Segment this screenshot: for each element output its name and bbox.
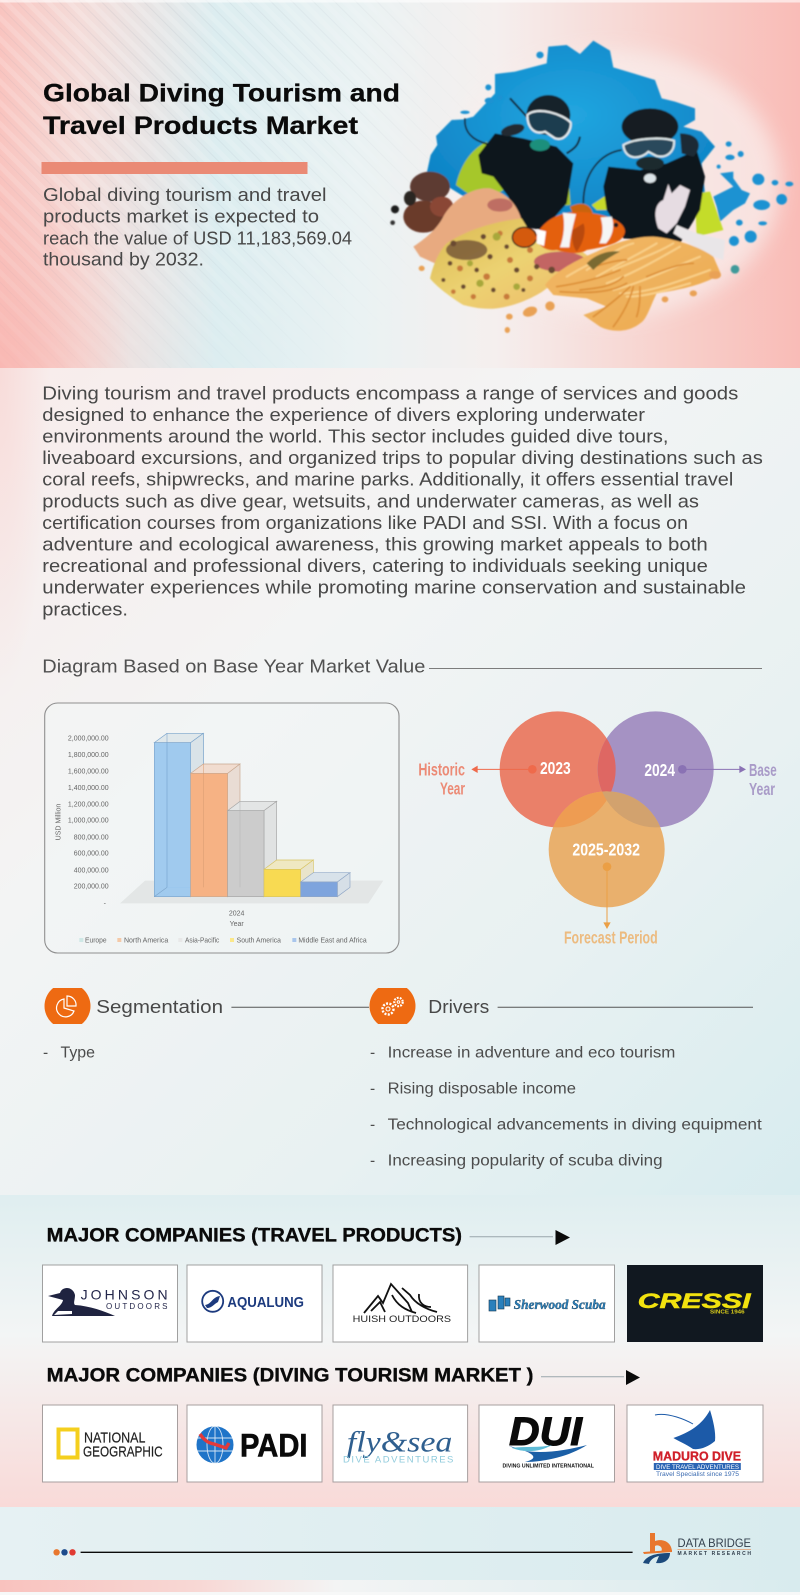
bar: South America (264, 860, 313, 897)
intro text: reach the value of USD 11,183,569.04 (43, 228, 352, 248)
label: 2023: 2023 (540, 758, 571, 778)
chart floor (120, 881, 383, 903)
intro text (43, 185, 352, 270)
heading: travel products companies: MAJOR COMPANIES (TRAVEL PRODUCTS) (47, 1226, 462, 1246)
description paragraph: environments around the world. This sector includes guided dive tours, (42, 426, 669, 446)
drivers heading: Drivers (428, 996, 489, 1017)
intro text: Global diving tourism and travel (43, 185, 326, 205)
description paragraph: practices. (42, 599, 128, 619)
icon: pie chart (44, 988, 90, 1024)
y axis labels: 200,000.00 (74, 884, 109, 891)
drivers list: Technological advancements in diving equipment (388, 1116, 763, 1134)
bar chart (55, 733, 383, 944)
blue water splash (427, 41, 715, 227)
logo: Sherwood Scuba (479, 1265, 614, 1342)
description paragraph: certification courses from organizations like PADI and SSI. With a focus on (42, 513, 688, 533)
title accent bar (42, 162, 308, 174)
peach coral (413, 188, 522, 263)
circle: forecast (549, 791, 665, 907)
venn diagram: historic, base and forecast years (418, 711, 777, 947)
y axis labels: 400,000.00 (74, 867, 109, 874)
logo: Johnson Outdoors (42, 1265, 178, 1342)
hero illustration: divers, coral and clownfish (390, 41, 793, 333)
y axis labels: 600,000.00 (74, 851, 109, 858)
description paragraph: designed to enhance the experience of divers exploring underwater (42, 405, 645, 425)
arrow: historic (471, 765, 537, 774)
description paragraph: underwater experiences while promoting marine conservation and sustainable (42, 578, 746, 598)
diagram heading: Diagram Based on Base Year Market Value (42, 657, 425, 677)
logo: PADI (187, 1405, 322, 1482)
orange anemone (545, 237, 721, 331)
logo: Johnson Outdoors: OUTDOORS (106, 1302, 168, 1311)
panel: drivers (370, 983, 763, 1170)
overlap: forecast and base (602, 792, 660, 828)
segmentation list: Type (60, 1044, 95, 1062)
drivers list: Rising disposable income (388, 1080, 576, 1098)
logo: Johnson Outdoors: JOHNSON (81, 1286, 168, 1302)
forecast period label: Forecast Period (564, 927, 658, 947)
coral specks (441, 198, 586, 300)
y axis labels: 2,000,000.00 (68, 736, 109, 743)
logo: National Geographic: GEOGRAPHIC (83, 1444, 163, 1461)
logo: National Geographic: NATIONAL (84, 1429, 145, 1446)
description paragraph (42, 383, 763, 619)
arrow: base (678, 765, 746, 774)
logo: Huish Outdoors: HUISH OUTDOORS (353, 1314, 451, 1325)
diver left (456, 95, 580, 230)
logo: Data Bridge Market Research: DATA BRIDGE (678, 1536, 751, 1550)
y axis labels: 1,200,000.00 (68, 801, 109, 808)
panel: segmentation (43, 983, 369, 1062)
legend: South America (237, 937, 281, 944)
logo: Maduro Dive: DIVE TRAVEL ADVENTURES (656, 1465, 739, 1471)
y axis labels: 1,000,000.00 (68, 818, 109, 825)
drivers list: - (370, 1080, 375, 1098)
drivers list: - (370, 1044, 375, 1062)
chart frame (45, 703, 399, 953)
footer rule with dots (53, 1549, 633, 1556)
legend (79, 937, 367, 944)
pale splash backdrop (447, 50, 780, 317)
base year label: Year (749, 779, 775, 799)
icon: gears (370, 988, 416, 1024)
logo: Data Bridge Market Research (643, 1533, 751, 1564)
logo: Aqualung (187, 1265, 322, 1342)
logo: Cressi: CRESSI (638, 1290, 752, 1313)
circle: base (598, 711, 714, 827)
drivers list: Increase in adventure and eco tourism (388, 1044, 675, 1062)
description paragraph: products such as dive gear, wetsuits, and underwater cameras, as well as (42, 491, 699, 511)
intro text: thousand by 2032. (43, 250, 204, 270)
circle: historic (500, 711, 616, 827)
logo: Fly and Sea Dive Adventures: fly&sea (347, 1426, 452, 1459)
description paragraph: liveaboard excursions, and organized trips to popular diving destinations such as (42, 448, 763, 468)
drivers list (370, 1044, 763, 1170)
logo: DUI (479, 1405, 614, 1482)
logo: Sherwood Scuba: Sherwood Scuba (514, 1298, 606, 1313)
logo: Fly and Sea Dive Adventures (333, 1405, 468, 1482)
segmentation list: - (43, 1044, 48, 1062)
arrow: forecast (603, 862, 611, 929)
description paragraph: coral reefs, shipwrecks, and marine parks. Additionally, it offers essential travel (42, 470, 733, 490)
water splatter specks (460, 52, 793, 246)
logo: Cressi: SINCE 1946 (710, 1310, 745, 1316)
legend: Middle East and Africa (298, 937, 367, 944)
brown coral (390, 172, 453, 233)
overlap: historic and base (598, 738, 616, 792)
intro text: products market is expected to (43, 207, 319, 227)
logo: Cressi (627, 1265, 763, 1342)
legend: Asia-Pacific (185, 937, 220, 944)
bar chart: Year (230, 921, 244, 928)
y axis labels: 1,600,000.00 (68, 769, 109, 776)
label: 2024: 2024 (644, 760, 675, 780)
description paragraph: recreational and professional divers, catering to individuals seeking unique (42, 556, 708, 576)
small coral fragments (419, 265, 739, 333)
base year label (749, 760, 777, 799)
segmentation list (43, 1044, 95, 1062)
chart panel: market value by region (45, 703, 399, 953)
diver right (583, 108, 725, 260)
description paragraph: Diving tourism and travel products encompass a range of services and goods (42, 383, 738, 403)
clownfish (512, 204, 625, 253)
label: 2025-2032: 2025-2032 (572, 840, 640, 860)
y axis labels: 1,400,000.00 (68, 785, 109, 792)
drivers list: - (370, 1152, 375, 1170)
logo: National Geographic (42, 1405, 178, 1482)
bar: Europe (154, 733, 203, 897)
y axis labels (68, 736, 109, 908)
speckled yellow coral (430, 218, 593, 309)
x axis labels: 2024 (229, 911, 245, 918)
y axis labels: - (104, 901, 107, 908)
logo: Huish Outdoors (333, 1265, 468, 1342)
logo: PADI: PADI (240, 1428, 308, 1464)
title: Global Diving Tourism and (43, 80, 400, 108)
logo: Maduro Dive: MADURO DIVE (653, 1450, 741, 1464)
historic year label: Year (440, 778, 465, 798)
y axis labels: 800,000.00 (74, 834, 109, 841)
logo: Fly and Sea Dive Adventures: DIVE ADVENTURES (343, 1455, 453, 1466)
base year label: Base (749, 760, 777, 780)
logo: Maduro Dive (627, 1405, 763, 1482)
logo: DUI: DIVING UNLIMITED INTERNATIONAL (502, 1463, 594, 1469)
logo: Data Bridge Market Research: MARKET RESEARCH (678, 1551, 751, 1557)
overlap: forecast and historic (553, 792, 606, 828)
drivers list: Increasing popularity of scuba diving (388, 1152, 663, 1170)
logo: Aqualung: AQUALUNG (227, 1294, 304, 1311)
bar: North America (191, 764, 240, 897)
historic year label (418, 759, 465, 798)
bar: Middle East and Africa (301, 873, 350, 897)
logo: DUI: DUI (509, 1410, 583, 1454)
legend: Europe (85, 937, 107, 944)
segmentation heading: Segmentation (96, 996, 223, 1017)
y axis labels: 1,800,000.00 (68, 752, 109, 759)
heading: diving tourism companies: MAJOR COMPANIES (DIVING TOURISM MARKET ) (47, 1366, 533, 1386)
y axis title: USD Million (55, 804, 62, 840)
bar: Asia-Pacific (228, 801, 277, 897)
drivers list: - (370, 1116, 375, 1134)
historic year label: Historic (418, 759, 465, 779)
logo: Maduro Dive: Travel Specialist since 1975 (656, 1472, 740, 1478)
title (43, 80, 400, 140)
title: Travel Products Market (43, 112, 359, 140)
description paragraph: adventure and ecological awareness, this growing market appeals to both (42, 534, 708, 554)
legend: North America (124, 937, 168, 944)
